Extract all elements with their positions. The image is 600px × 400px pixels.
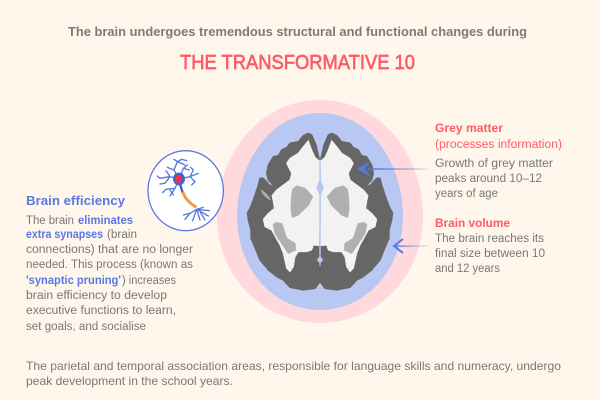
body text bbox=[435, 233, 545, 275]
body text: peaks around 10–12 bbox=[435, 173, 542, 185]
body text: Growth of grey matter bbox=[435, 158, 553, 170]
body text: The brain reaches its bbox=[435, 233, 544, 245]
body text: ) increases bbox=[122, 275, 176, 287]
body text: executive functions to learn, bbox=[26, 305, 176, 317]
heading: brain efficiency: Brain efficiency bbox=[26, 193, 126, 208]
arrow: grey matter bbox=[357, 162, 427, 176]
body text: final size between 10 bbox=[435, 248, 545, 260]
arrow: brain volume bbox=[394, 239, 427, 253]
heading: brain volume: Brain volume bbox=[435, 216, 510, 230]
body text: extra synapses bbox=[26, 229, 103, 241]
body text bbox=[435, 158, 553, 200]
body text: connections) that are no longer bbox=[26, 244, 193, 256]
blue inner ellipse bbox=[237, 113, 403, 310]
brain cross-section bbox=[247, 133, 393, 290]
body text: (brain bbox=[107, 229, 137, 241]
heading: grey matter: Grey matter bbox=[435, 121, 503, 135]
intro heading: The brain undergoes tremendous structural and functional changes during bbox=[68, 24, 527, 39]
footer text: peak development in the school years. bbox=[26, 374, 233, 388]
body text bbox=[26, 215, 193, 333]
subheading: processes information: (processes information) bbox=[435, 139, 562, 151]
body text: needed. This process (known as bbox=[26, 259, 193, 271]
body text: The brain bbox=[26, 215, 74, 227]
footer text: The parietal and temporal association areas, responsible for language skills and numeracy, undergo bbox=[26, 359, 561, 373]
body text: 'synaptic pruning' bbox=[26, 275, 121, 287]
footer text bbox=[26, 359, 561, 388]
body text: years of age bbox=[435, 188, 498, 200]
title: THE TRANSFORMATIVE 10 bbox=[180, 52, 415, 74]
body text: brain efficiency to develop bbox=[26, 290, 167, 302]
body text: and 12 years bbox=[435, 263, 500, 275]
body text: eliminates bbox=[78, 215, 133, 227]
panel: brain efficiency bbox=[26, 193, 193, 333]
pink outer ellipse: brain volume bbox=[217, 100, 423, 323]
panel: grey matter bbox=[435, 121, 562, 200]
brain diagram bbox=[217, 100, 423, 323]
body text: set goals, and socialise bbox=[26, 321, 146, 333]
panel: brain volume bbox=[435, 216, 545, 275]
icon: neuron bbox=[148, 151, 223, 231]
